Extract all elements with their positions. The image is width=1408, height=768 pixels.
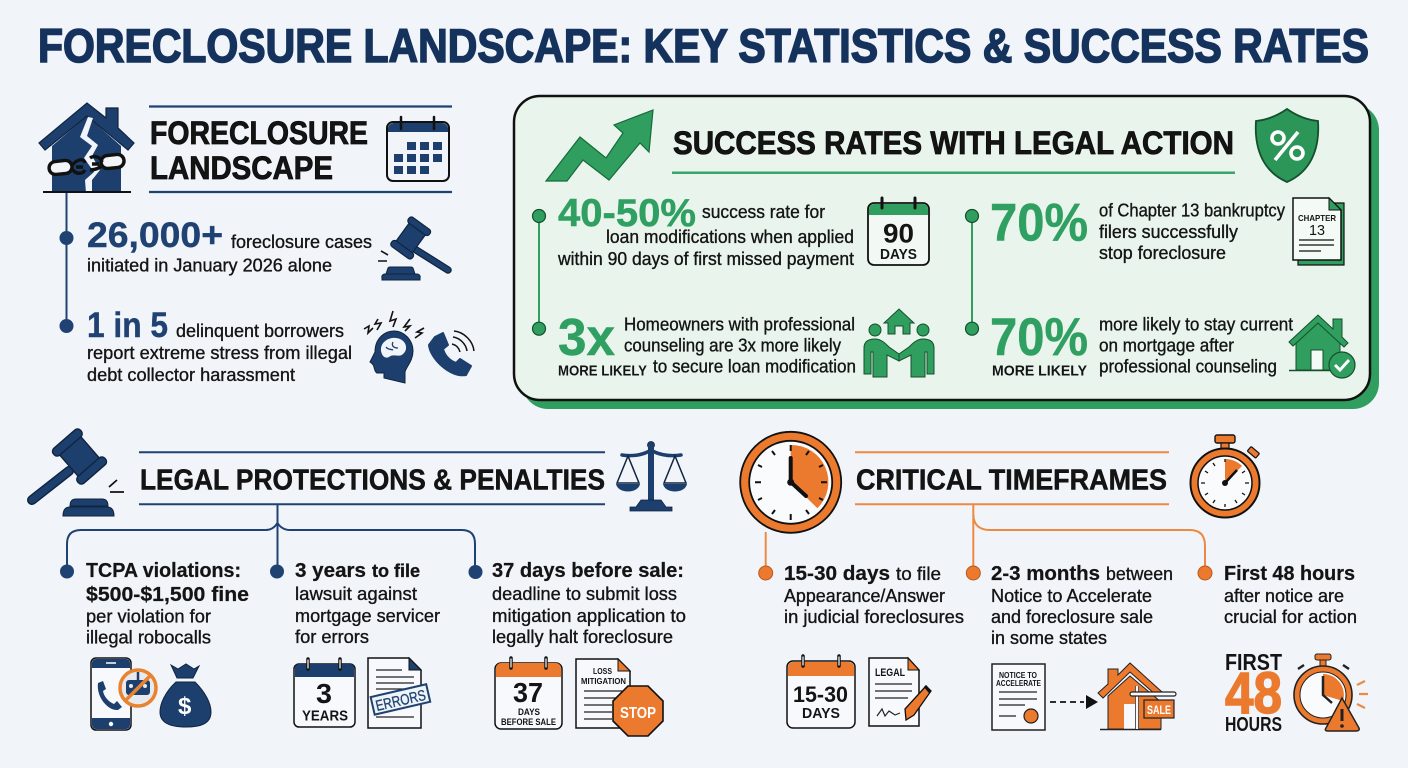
icon: stopwatch [1190,435,1260,518]
icon: 3 years calendar: YEARS [302,708,348,725]
icon: loss mitigation stop: STOP [620,705,656,722]
heading: legal protections [139,452,605,504]
text: first 48 hours: First 48 hours [1224,563,1355,585]
stat: 70% more likely: 70% [990,308,1088,367]
stat: 3x more likely: MORE LIKELY [558,363,647,380]
stat: 1 in 5 borrowers: report extreme stress from illegal [87,343,352,363]
stat: 26,000+ cases [87,216,372,276]
stat: 40-50% success rate: within 90 days of first missed payment [557,249,854,269]
connector tree [60,504,482,579]
icon: loss mitigation stop: MITIGATION [581,676,626,686]
icon: 37 days calendar: BEFORE SALE [501,717,556,728]
icon: calendar [387,117,449,181]
text: TCPA violations: TCPA violations: [86,560,241,582]
icon: 15-30 days calendar: DAYS [802,705,840,722]
icon: legal document with pen [869,658,931,726]
stat: 1 in 5 borrowers: delinquent borrowers [176,321,344,341]
icon: scales of justice [616,442,687,511]
text: 3 years to file: for errors [295,627,369,647]
stat: 70% chapter 13: 70% [990,194,1088,253]
text: TCPA violations [86,560,249,648]
icon: gavel [378,216,448,280]
text: TCPA violations: $500-$1,500 fine [86,584,249,606]
icon: 15-30 days calendar [787,656,855,728]
icon: 3 years calendar [294,659,355,727]
text: 2-3 months: between [1106,564,1173,584]
stat: 1 in 5 borrowers: 1 in 5 [87,306,168,345]
icon: 90 days calendar: 90 [883,219,914,249]
icon: large gavel [32,427,124,516]
heading: critical timeframes: CRITICAL TIMEFRAMES [856,464,1167,496]
text: TCPA violations: illegal robocalls [86,628,211,648]
stat: 70% chapter 13 [990,194,1285,263]
stat: 70% chapter 13: stop foreclosure [1099,243,1226,263]
icon: first 48 hours label: HOURS [1225,714,1282,736]
icon: house with sale sign [1098,663,1176,730]
icon: stopwatch with warning [1294,654,1368,731]
text: 2-3 months: 2-3 months [991,563,1100,585]
stat: 3x more likely: 3x [558,309,615,367]
stat: 1 in 5 borrowers: debt collector harassment [87,365,295,385]
icon: 90 days calendar: DAYS [880,247,917,263]
timeline: right column [966,210,978,335]
stat: 3x more likely: to secure loan modification [653,357,856,377]
text: 37 days before sale [492,560,686,647]
text: TCPA violations: per violation for [86,607,211,627]
icon: 15-30 days calendar: 15-30 [793,682,848,707]
heading: legal protections: LEGAL PROTECTIONS & PENALTIES [140,464,605,496]
icon: broken house with chain [39,103,134,193]
icon: money bag [160,664,211,727]
icon: first 48 hours label: 48 [1225,661,1282,726]
text: 15-30 days: to file [896,564,941,584]
icon: chapter 13 document: CHAPTER [1298,213,1336,223]
stat: 70% more likely: more likely to stay current [1099,315,1293,335]
icon: money bag: $ [178,693,192,720]
icon: percent shield [1256,109,1318,182]
icon: house with sale sign: SALE [1147,703,1171,717]
icon: legal document with pen: LEGAL [875,667,905,679]
text: 2-3 months: Notice to Accelerate [991,586,1152,606]
stat: 3x more likely: counseling are 3x more likely [624,336,841,356]
icon: stressed head [364,311,424,383]
icon: loss mitigation stop [576,659,663,736]
stat: 3x more likely [558,309,856,380]
icon: notice to accelerate document [992,664,1045,730]
text: 3 years to file: 3 years [295,560,366,582]
icon: large clock [740,432,841,533]
stat: 26,000+ cases: foreclosure cases [231,232,372,252]
heading: success rates: SUCCESS RATES WITH LEGAL ACTION [673,125,1234,161]
text: 15-30 days [784,563,964,627]
stat: 26,000+ cases: initiated in January 2026 alone [87,256,332,276]
icon: errors document: ERRORS [374,687,428,715]
stat: 70% more likely: MORE LIKELY [992,363,1087,380]
panel: legal protections and penalties [32,427,687,736]
stat: 26,000+ cases: 26,000+ [87,216,223,255]
text: 3 years to file: to file [372,561,420,581]
heading: foreclosure landscape: LANDSCAPE [150,150,333,186]
stat: 40-50% success rate: loan modifications when applied [606,227,854,247]
text: 37 days before sale: mitigation application to [492,606,686,626]
text: 2-3 months: and foreclosure sale [991,607,1153,627]
heading: foreclosure landscape: FORECLOSURE [150,115,368,151]
icon: loss mitigation stop: LOSS [593,666,612,676]
icon: phone with robocall ban [91,658,156,730]
text: first 48 hours [1224,563,1357,627]
text: 3 years to file [295,560,440,647]
panel: foreclosure landscape [39,103,474,385]
timeline [60,193,74,333]
icon: house with check [1289,315,1355,378]
icon: notice to accelerate document: NOTICE TO [999,670,1037,680]
icon: errors document [368,658,430,728]
stat: 40-50% success rate [557,192,854,269]
icon: ringing phone [429,331,474,375]
icon: first 48 hours label [1225,649,1282,736]
connector tree [759,504,1212,580]
text: 15-30 days: in judicial foreclosures [784,607,964,627]
icon: 90 days calendar [868,198,929,265]
stat: 70% chapter 13: filers successfully [1099,222,1238,242]
text: 37 days before sale: deadline to submit loss [492,584,677,604]
icon: 3 years calendar: 3 [316,678,332,709]
text: 37 days before sale: legally halt foreclosure [492,627,673,647]
stat: 70% chapter 13: of Chapter 13 bankruptcy [1099,201,1285,221]
text: first 48 hours: crucial for action [1224,607,1357,627]
icon: chapter 13 document: 13 [1309,222,1325,239]
icon: 37 days calendar: DAYS [518,707,540,718]
text: 2-3 months [991,563,1173,648]
icon: 37 days calendar: 37 [513,677,543,708]
text: 3 years to file: lawsuit against [295,584,417,604]
stat: 70% more likely: professional counseling [1099,357,1277,377]
text: 2-3 months: in some states [991,628,1107,648]
stat: 40-50% success rate: 40-50% [558,192,696,235]
icon: notice to accelerate document: ACCELERATE [996,678,1041,688]
stat: 1 in 5 borrowers [87,306,352,385]
text: first 48 hours: after notice are [1224,586,1344,606]
panel: success rates with legal action [514,96,1379,409]
icon: chapter 13 document [1293,198,1344,265]
text: 37 days before sale: 37 days before sale: [492,560,684,582]
stat: 70% more likely [990,308,1293,380]
text: 3 years to file: mortgage servicer [295,606,440,626]
panel: critical timeframes [740,432,1368,736]
icon: 37 days calendar [495,658,562,729]
icon: first 48 hours label: FIRST [1225,649,1282,675]
timeline: left column [532,210,546,335]
icon: rising arrow [546,110,653,181]
arrow: notice to sale [1050,695,1098,709]
stat: 70% more likely: on mortgage after [1099,336,1234,356]
text: 15-30 days: Appearance/Answer [784,586,945,606]
text: 15-30 days: 15-30 days [784,563,890,585]
heading: critical timeframes [855,452,1169,504]
heading: foreclosure landscape [149,106,452,192]
icon: people with house [864,309,934,377]
stat: 3x more likely: Homeowners with professional [624,315,855,335]
panel background [514,96,1379,409]
stat: 40-50% success rate: success rate for [702,202,825,222]
